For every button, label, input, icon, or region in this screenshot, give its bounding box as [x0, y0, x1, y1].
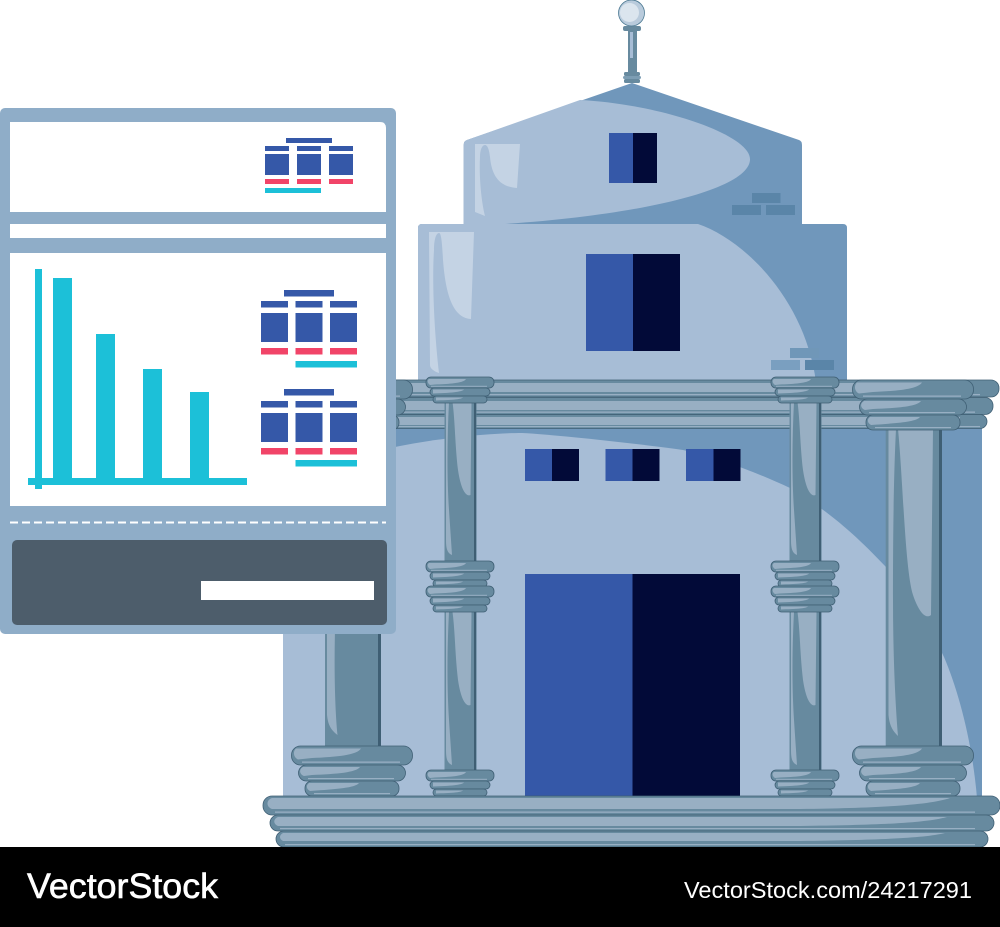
window: top tier: [609, 133, 657, 183]
white footer bar: [201, 581, 374, 600]
small column one: [426, 377, 494, 796]
left large column: [292, 380, 412, 796]
watermark band: [0, 847, 1000, 927]
dashed separator: [10, 522, 386, 524]
panel: dark footer box: [12, 540, 387, 625]
bricks: top tier: [732, 193, 795, 215]
highlight: top tier: [475, 144, 520, 216]
panel: top white header box: [10, 122, 386, 212]
door: [525, 574, 740, 796]
base steps: [263, 796, 1000, 847]
ground tier of building: [283, 428, 982, 798]
icon: table one beside chart: [261, 290, 357, 368]
icon: table two beside chart: [261, 389, 357, 466]
watermark logo text: VectorStock: [27, 867, 219, 906]
panel: chart area: [10, 253, 386, 506]
icon: small table in header: [265, 138, 353, 193]
panel: financial report: [0, 108, 396, 634]
building: [263, 0, 1000, 847]
watermark url text: VectorStock.com/24217291: [684, 877, 972, 903]
right large column: [852, 380, 974, 796]
middle tier of building: [418, 224, 847, 382]
white strip: [10, 224, 386, 238]
top tier of building: [464, 83, 802, 226]
finial: globe on spire: [618, 0, 644, 83]
bricks: middle tier: [771, 348, 834, 370]
small column two: [771, 377, 839, 796]
entablature beams: [380, 380, 999, 428]
bar chart: [28, 269, 247, 489]
windows: row of three: [525, 449, 740, 481]
highlight: middle tier: [429, 232, 474, 373]
window: middle tier: [586, 254, 680, 351]
